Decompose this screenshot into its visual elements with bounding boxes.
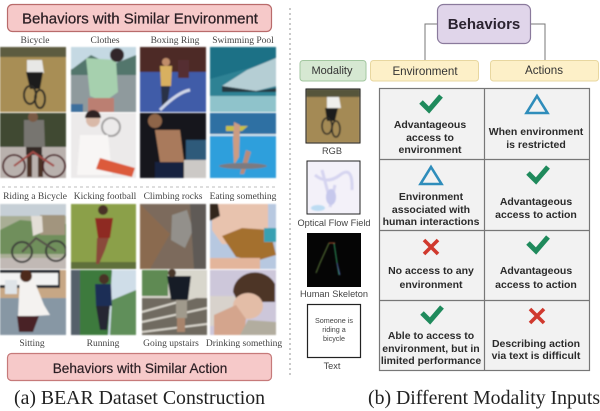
cell: optical flow environment: human interactions [383,216,480,228]
cell: RGB actions [489,96,584,151]
icon: cross [530,309,544,323]
action-row labels: Running [87,339,120,349]
cell: text environment: Able to access to [388,330,474,342]
photo: pool underwater [210,47,276,112]
cell: RGB environment: environment [398,144,462,156]
dashed separator [2,186,276,188]
action-row labels: Drinking something [206,339,282,349]
action labels: Riding a Bicycle [3,192,67,202]
photo grid: similar action [0,204,276,335]
photo: synchronized swimming [210,113,276,178]
caption: different modality inputs: (b) Different Modality Inputs [368,387,600,409]
heading: similar environment [8,4,272,32]
action-row labels: Going upstairs [143,339,199,349]
photo: eating something [210,204,276,269]
header: actions: Actions [525,64,563,77]
photo: bicycle field [0,47,66,112]
environment labels: Bicycle [20,36,50,46]
environment labels: Boxing Ring [151,36,200,46]
modality: text: Someone is [315,316,353,325]
cell: RGB environment: access to [406,132,454,144]
cell: text environment [381,307,481,367]
cell: optical flow actions: Advantageous [500,196,572,208]
icon: triangle [526,96,548,113]
environment labels [20,36,274,46]
cell: RGB environment: Advantageous [394,119,466,131]
heading: behaviors [438,4,530,44]
heading: behaviors: Behaviors [448,16,520,33]
action labels: Kicking football [74,191,137,202]
photo: climbing rocks [140,204,206,269]
header: environment: Environment [392,65,458,78]
action-row labels [19,339,282,349]
cell: RGB environment [394,96,466,156]
cell: optical flow actions [495,167,577,221]
photo: running [71,270,136,335]
header: modality: Modality [312,65,353,77]
header: environment [370,60,478,81]
environment labels: Clothes [90,36,120,46]
modality: optical flow field [297,161,371,228]
photo: boxer [140,113,206,178]
panel: BEAR dataset construction [0,4,282,409]
cell: text actions: Describing action [492,338,580,350]
action labels: Eating something [210,192,277,202]
cell: skeleton environment [388,240,474,291]
icon: check [422,307,442,321]
photo: going upstairs [142,269,207,335]
action labels: Climbing rocks [144,192,203,202]
cell: optical flow actions: access to action [495,209,577,221]
cell: skeleton environment: No access to any [388,265,474,277]
header: modality [300,60,366,81]
modality: text: riding a [322,325,346,334]
heading: similar environment: Behaviors with Similar Environment [22,10,259,28]
caption: BEAR dataset construction: (a) BEAR Dataset Construction [14,387,265,409]
photo grid: similar environment [0,47,276,178]
cell: skeleton environment: environment [399,279,463,291]
modality: human skeleton: Human Skeleton [300,289,368,299]
cell: skeleton actions: Advantageous [500,265,572,277]
cell: optical flow environment: Environment [399,191,464,203]
modality: RGB [306,89,360,156]
modality: text [308,304,360,371]
photo: sitting [0,270,66,335]
vertical dotted divider [289,8,291,376]
photo: boxing ring [140,47,206,112]
action labels [3,191,277,202]
cell: text environment: environment, but in [382,343,480,355]
photo: drinking something [210,270,276,335]
heading: similar action: Behaviors with Similar Action [53,361,227,376]
heading: similar action [8,354,272,380]
modality: RGB: RGB [322,146,342,156]
cell: RGB actions: is restricted [506,139,566,151]
icon: check [528,167,548,181]
comparison table [379,88,590,371]
modality: text: bicycle [323,334,345,343]
panel: modality inputs [297,4,600,409]
icon: check [421,96,441,110]
cell: text actions [492,309,581,362]
cell: text actions: via text is difficult [492,350,581,362]
photo: riding a bicycle [0,204,66,269]
cell: skeleton actions [495,237,577,291]
photo: bicycle road [0,112,66,178]
cell: text environment: limited performance [381,355,481,367]
environment labels: Swimming Pool [212,36,274,46]
photo: kicking football [71,204,136,269]
action-row labels: Sitting [19,339,45,349]
cell: optical flow environment [383,167,480,228]
icon: cross [424,240,438,254]
cell: skeleton actions: access to action [495,279,577,291]
icon: triangle [420,167,442,184]
cell: optical flow environment: associated with [392,204,470,216]
photo: clothes outdoors [71,47,136,112]
icon: check [528,237,548,251]
header: actions [490,60,598,81]
photo: clothes laundry [71,110,136,178]
modality: human skeleton [300,233,368,299]
connector lines [425,24,545,60]
modality: optical flow field: Optical Flow Field [297,218,371,228]
modality: text: Text [324,361,341,371]
cell: RGB actions: When environment [489,126,584,138]
